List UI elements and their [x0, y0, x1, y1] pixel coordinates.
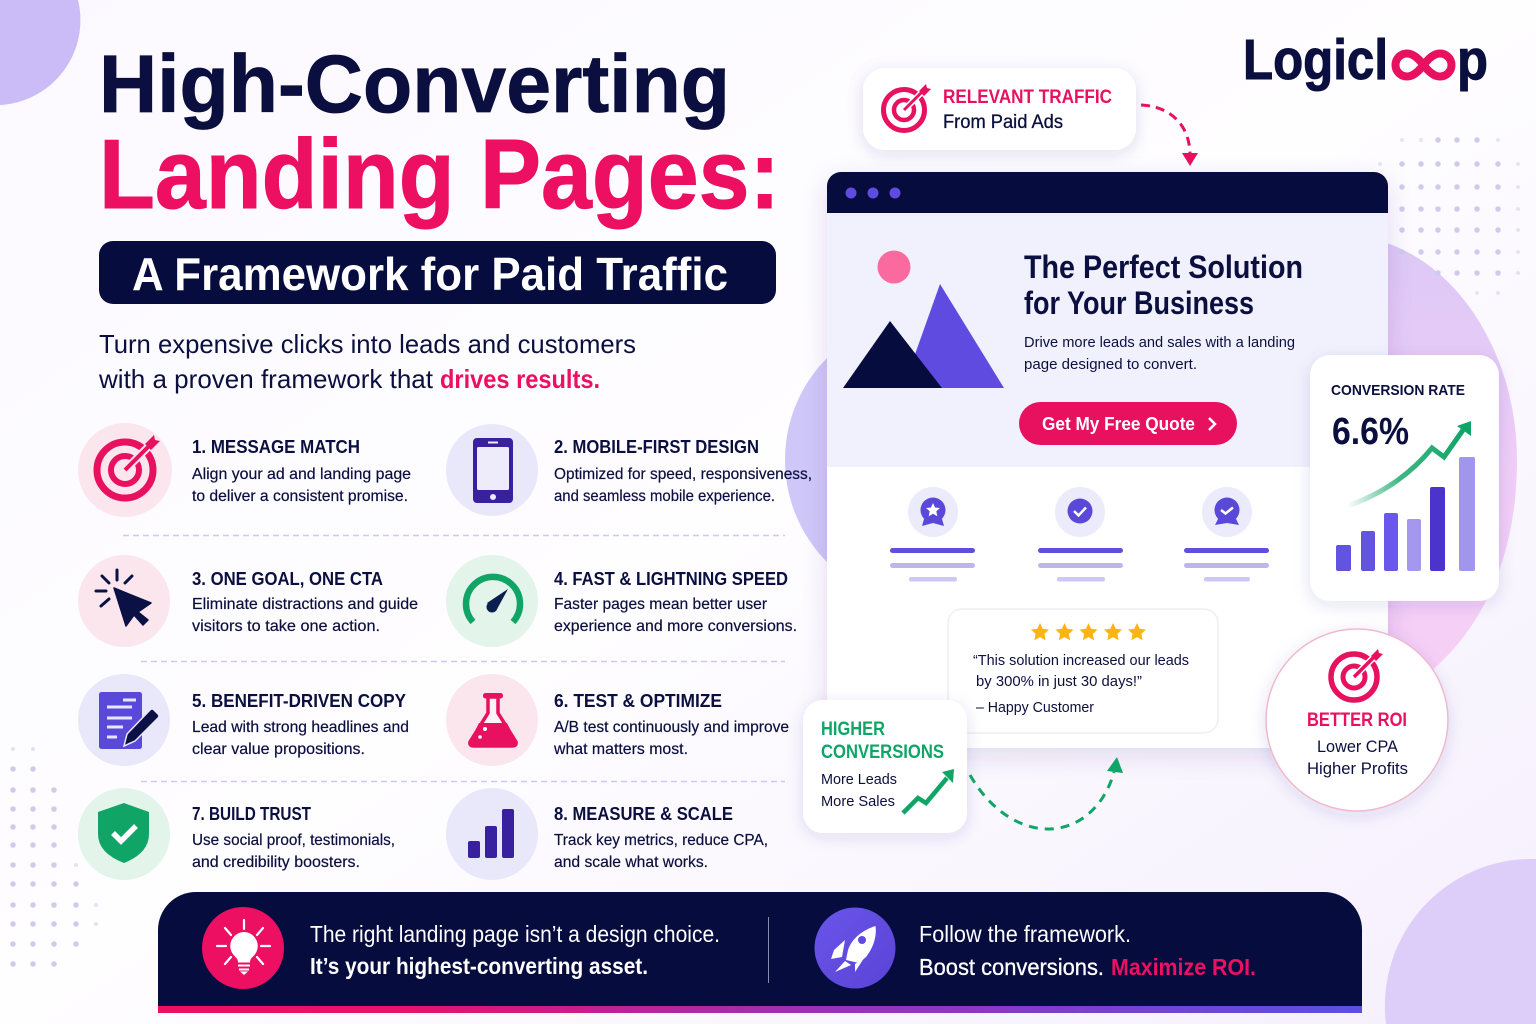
- logo: p: [1457, 28, 1488, 92]
- subtitle banner: A Framework for Paid Traffic: [132, 248, 728, 300]
- item 3: one goal one cta: [78, 555, 418, 647]
- item 5: benefit-driven copy: 5. BENEFIT-DRIVEN COPY: [192, 690, 407, 711]
- icon: infinity loop: [1396, 54, 1452, 76]
- intro text: drives results.: [440, 364, 600, 394]
- item 2: mobile-first design: and seamless mobile experience.: [554, 488, 775, 505]
- item 7: build trust: [78, 788, 395, 880]
- icon: growth arrow: [903, 769, 954, 813]
- item 4: fast and lightning speed: experience and more conversions.: [554, 618, 797, 635]
- icon: speed gauge: [466, 577, 520, 622]
- callout: higher conversions: HIGHER: [821, 719, 885, 740]
- item 8: measure and scale: Track key metrics, reduce CPA,: [554, 832, 768, 849]
- hero image placeholder: [843, 250, 1004, 388]
- decorative blob: purple left: [785, 315, 1075, 605]
- item 1: message match: [78, 423, 411, 517]
- item 6: test and optimize: [446, 674, 789, 766]
- badge: better roi: BETTER ROI: [1307, 710, 1407, 731]
- logo: [1243, 28, 1488, 92]
- intro text: [98, 329, 636, 394]
- icon: target: [884, 84, 931, 130]
- callout: relevant traffic: [863, 68, 1136, 150]
- logo: Logicl: [1243, 28, 1388, 92]
- card: conversion rate: CONVERSION RATE: [1331, 382, 1465, 399]
- banner message left: It’s your highest-converting asset.: [310, 953, 648, 979]
- item 5: benefit-driven copy: Lead with strong headlines and: [192, 719, 409, 736]
- dot pattern: bottom left: [13, 749, 96, 964]
- hero heading: for Your Business: [1024, 285, 1254, 321]
- hero description: page designed to convert.: [1024, 356, 1197, 373]
- title: High-Converting: [99, 39, 730, 130]
- icon: document and pencil: [99, 692, 159, 749]
- feature 2: [1038, 487, 1123, 582]
- banner message right: Boost conversions.: [919, 954, 1104, 980]
- feature 3: [1184, 487, 1269, 582]
- item 1: message match: to deliver a consistent promise.: [192, 488, 408, 505]
- star rating: [1031, 623, 1146, 640]
- icon: cursor click: [96, 570, 151, 626]
- hero heading: [1024, 249, 1303, 321]
- trend arrow: [1347, 421, 1471, 506]
- decorative circle: top left: [0, 0, 80, 105]
- callout: higher conversions: CONVERSIONS: [821, 742, 944, 763]
- item 7: build trust: 7. BUILD TRUST: [192, 803, 312, 824]
- item 1: message match: Align your ad and landing page: [192, 466, 411, 483]
- hero description: [1024, 334, 1295, 373]
- item 6: test and optimize: what matters most.: [553, 741, 688, 758]
- bottom banner: [158, 892, 1362, 1013]
- item 6: test and optimize: 6. TEST & OPTIMIZE: [554, 690, 722, 711]
- item 2: mobile-first design: [446, 424, 812, 516]
- intro text: with a proven framework that: [98, 364, 434, 394]
- item 8: measure and scale: [446, 788, 768, 880]
- decorative blob: pink right: [1340, 235, 1517, 700]
- dot pattern: top right: [1380, 140, 1518, 293]
- testimonial card: [948, 609, 1218, 733]
- arrow: conversions to page: [970, 757, 1123, 829]
- item 5: benefit-driven copy: [78, 674, 409, 766]
- icon: bar chart: [468, 809, 514, 858]
- callout: relevant traffic: RELEVANT TRAFFIC: [943, 87, 1112, 108]
- title: [99, 39, 780, 229]
- intro text: Turn expensive clicks into leads and customers: [99, 329, 636, 359]
- item 4: fast and lightning speed: [446, 555, 797, 647]
- badge: better roi: [1266, 629, 1448, 811]
- testimonial card: – Happy Customer: [976, 699, 1094, 716]
- callout: higher conversions: [803, 700, 967, 833]
- item 1: message match: 1. MESSAGE MATCH: [192, 436, 360, 457]
- card: conversion rate: [1310, 355, 1499, 601]
- item 2: mobile-first design: Optimized for speed, responsiveness,: [554, 466, 812, 483]
- title: Landing Pages:: [99, 119, 780, 229]
- item 8: measure and scale: and scale what works.: [554, 854, 708, 871]
- item 5: benefit-driven copy: clear value propositions.: [192, 741, 365, 758]
- item 2: mobile-first design: 2. MOBILE-FIRST DESIGN: [554, 436, 759, 457]
- icon: target: [1331, 649, 1383, 700]
- bar chart: [1336, 457, 1475, 571]
- cta button: Get My Free Quote: [1042, 414, 1195, 434]
- item 4: fast and lightning speed: 4. FAST & LIGHTNING SPEED: [554, 568, 788, 589]
- item 3: one goal one cta: 3. ONE GOAL, ONE CTA: [192, 568, 383, 589]
- testimonial card: by 300% in just 30 days!”: [976, 673, 1142, 690]
- icon: phone: [473, 438, 513, 503]
- item 3: one goal one cta: visitors to take one action.: [192, 618, 380, 635]
- item 3: one goal one cta: Eliminate distractions and guide: [192, 596, 418, 613]
- item 4: fast and lightning speed: Faster pages mean better user: [554, 596, 768, 613]
- icon: shield: [98, 803, 149, 863]
- banner message right: Follow the framework.: [919, 921, 1131, 947]
- banner message right: Maximize ROI.: [1111, 954, 1256, 980]
- hero heading: The Perfect Solution: [1024, 249, 1303, 285]
- item 6: test and optimize: A/B test continuously and improve: [554, 719, 789, 736]
- badge: better roi: Lower CPA: [1317, 737, 1399, 756]
- browser header: [827, 172, 1388, 213]
- callout: higher conversions: More Sales: [821, 793, 895, 810]
- callout: relevant traffic: From Paid Ads: [943, 112, 1063, 133]
- item 7: build trust: Use social proof, testimonials,: [192, 832, 395, 849]
- card: conversion rate: 6.6%: [1332, 411, 1409, 453]
- icon: light bulb: [202, 907, 284, 989]
- item 8: measure and scale: 8. MEASURE & SCALE: [554, 803, 733, 824]
- banner message left: The right landing page isn’t a design choice.: [310, 921, 720, 947]
- icon: target: [97, 435, 160, 498]
- testimonial card: “This solution increased our leads: [973, 652, 1189, 669]
- hero description: Drive more leads and sales with a landing: [1024, 334, 1295, 351]
- banner message left: [310, 921, 720, 979]
- landing page mockup: [827, 172, 1388, 748]
- feature 1: [890, 487, 975, 582]
- cta button: [1019, 402, 1237, 445]
- icon: flask: [469, 693, 517, 747]
- arrow: traffic to page: [1141, 105, 1198, 166]
- banner message right: [919, 921, 1256, 980]
- icon: rocket: [814, 908, 896, 988]
- callout: higher conversions: More Leads: [821, 771, 897, 788]
- item 7: build trust: and credibility boosters.: [192, 854, 360, 871]
- decorative circle: bottom right: [1385, 859, 1536, 1024]
- badge: better roi: Higher Profits: [1307, 759, 1408, 778]
